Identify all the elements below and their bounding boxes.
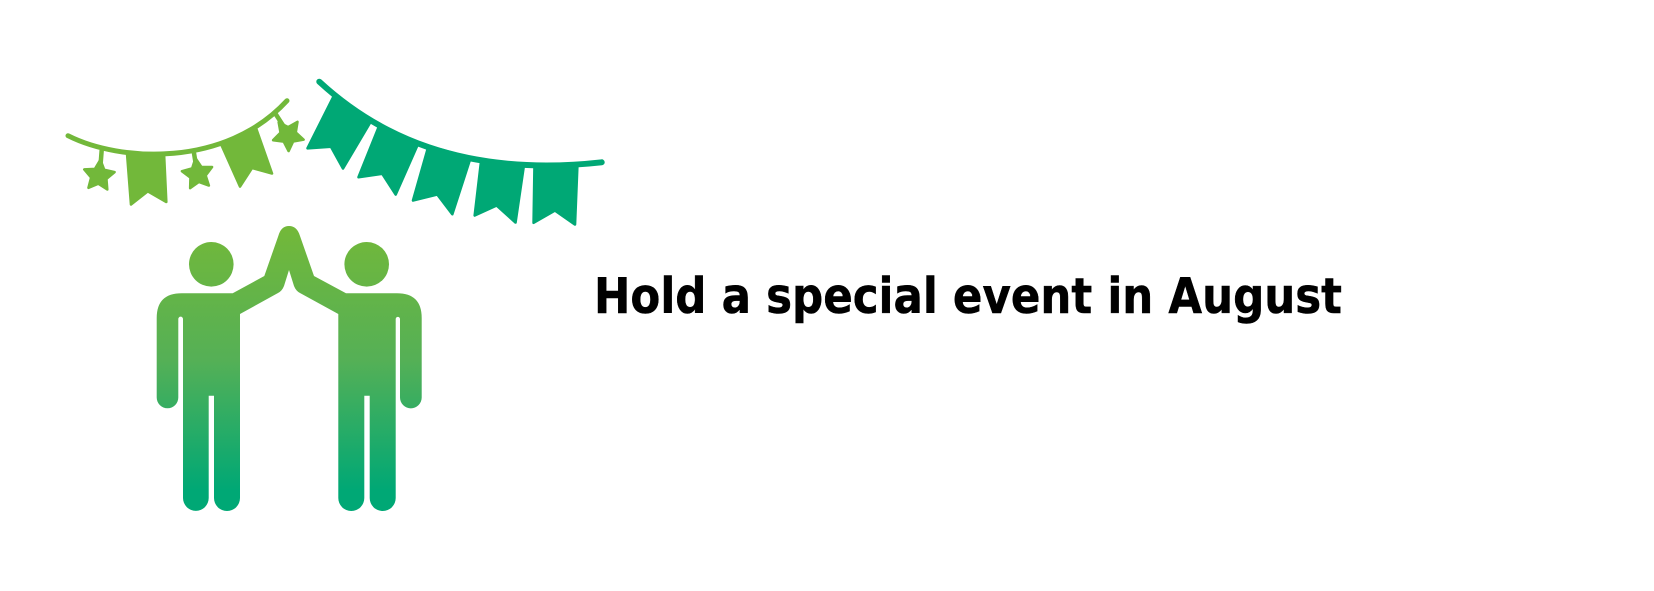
- icon: dark green bunting: [308, 82, 602, 224]
- bodies with raised arms: [157, 226, 422, 511]
- icon: two people high five: [157, 226, 422, 511]
- right person head: [344, 242, 389, 287]
- icon: light green bunting: [68, 101, 310, 204]
- heading text: Hold a special event in August: [594, 268, 1342, 325]
- left person head: [189, 242, 234, 287]
